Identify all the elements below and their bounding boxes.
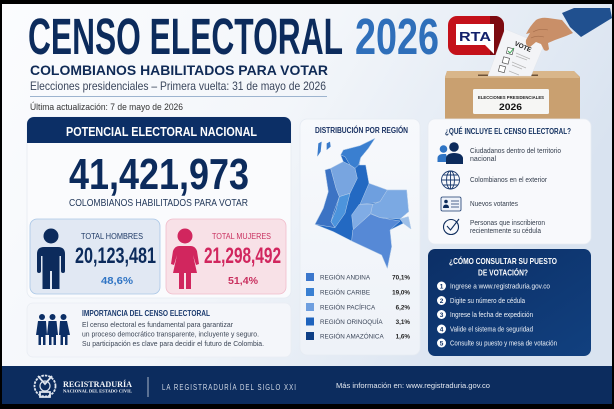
item: cédula: recientemente su cédula [470, 228, 541, 235]
item: ciudadanos [470, 148, 561, 163]
icon: globe [442, 171, 460, 189]
item: exterior: Colombianos en el exterior [470, 177, 548, 184]
legend [306, 272, 410, 340]
icon: citizens [438, 142, 463, 164]
subtitle: COLOMBIANOS HABILITADOS PARA VOTAR [30, 62, 328, 78]
panel title [449, 255, 557, 278]
body text: Su participación es clave para decidir el futuro de Colombia. [82, 339, 264, 348]
legend: orinoquía: REGIÓN ORINOQUÍA [320, 317, 383, 326]
logo wordmark: NACIONAL DEL ESTADO CIVIL [63, 390, 133, 394]
card: mujeres: 51,4% [228, 275, 259, 287]
step 5 [437, 338, 557, 348]
footer slogan: LA REGISTRADURÍA DEL SIGLO XXI [162, 382, 296, 392]
step 5: 5 [440, 340, 444, 348]
panel: distribución por región [300, 119, 420, 355]
legend: caribe: 19,0% [392, 290, 410, 296]
legend: orinoquía: 3,1% [396, 319, 410, 326]
ballot box [445, 71, 580, 120]
icon: woman [171, 228, 199, 289]
card: mujeres [166, 219, 286, 294]
icon: RTA logo [448, 16, 504, 55]
body text [82, 320, 264, 348]
card: hombres: 48,6% [101, 275, 134, 287]
step 4: 4 [440, 326, 444, 334]
panel: cómo consultar [428, 249, 591, 356]
item: cédula: Personas que inscribieron [470, 220, 545, 227]
step 3 [437, 310, 533, 319]
icon: id card [441, 197, 461, 211]
step 2 [437, 296, 525, 305]
card: mujeres: 21,298,492 [204, 243, 281, 268]
panel: distribución por región: DISTRIBUCIÓN POR REGIÓN [315, 126, 408, 135]
step 5: Consulte su puesto y mesa de votación [450, 340, 557, 348]
panel header [27, 117, 291, 143]
item: cédula [470, 220, 545, 235]
legend: caribe: REGIÓN CARIBE [320, 288, 370, 296]
big number: 41,421,973 [69, 150, 249, 199]
box label [473, 89, 549, 114]
item: ciudadanos: nacional [470, 156, 497, 163]
step 2: 2 [440, 298, 444, 305]
legend: amazónica: 1,6% [396, 334, 410, 340]
step 4 [437, 324, 533, 334]
panel: importancia: IMPORTANCIA DEL CENSO ELECTORAL [82, 309, 210, 318]
step 3: 3 [440, 312, 444, 319]
title: 2026 [355, 8, 439, 65]
panel title: DE VOTACIÓN? [478, 266, 528, 278]
body text: un proceso democrático transparente, incluyente y seguro. [82, 330, 259, 338]
footer [2, 366, 612, 404]
card: hombres: 20,123,481 [75, 243, 156, 268]
legend: amazónica: REGIÓN AMAZÓNICA [320, 332, 384, 340]
last update: Última actualización: 7 de mayo de 2026 [30, 102, 183, 113]
hand and sleeve [526, 8, 612, 51]
panel: qué incluye: ¿QUÉ INCLUYE EL CENSO ELECTORAL? [445, 127, 571, 136]
big number caption: COLOMBIANOS HABILITADOS PARA VOTAR [69, 197, 248, 209]
footer link: Más información en: www.registraduria.gov.co [336, 381, 490, 390]
icon: registraduría crest [34, 376, 56, 397]
election date: Elecciones presidenciales – Primera vuelta: 31 de mayo de 2026 [30, 79, 326, 93]
legend: andina: 70,1% [392, 274, 410, 282]
legend: pacífica: REGIÓN PACÍFICA [320, 302, 376, 312]
legend: pacífica [306, 302, 410, 312]
icon: check circle [444, 219, 459, 234]
step 2: Digite su número de cédula [450, 298, 525, 305]
icon: RTA logo: RTA [459, 30, 491, 44]
ballot paper: VOTE [513, 40, 533, 54]
item: nuevos votantes: Nuevos votantes [470, 201, 518, 208]
step 3: Ingrese la fecha de expedición [450, 312, 533, 319]
card: mujeres: TOTAL MUJERES [212, 232, 271, 241]
step 4: Valide el sistema de seguridad [450, 326, 533, 334]
legend: caribe [306, 288, 410, 296]
icon: man [37, 228, 65, 289]
legend: amazónica [306, 332, 410, 340]
logo wordmark [63, 379, 133, 394]
title: CENSO ELECTORAL [28, 8, 343, 65]
step 1: 1 [440, 284, 444, 290]
step 1 [437, 282, 550, 290]
panel: potencial electoral nacional [27, 117, 291, 298]
icon: three people [36, 314, 70, 345]
map of Colombia [315, 138, 411, 268]
panel: qué incluye [428, 119, 591, 244]
step 1: Ingrese a www.registraduria.gov.co [450, 284, 550, 290]
box label: 2026 [499, 102, 522, 113]
box label: ELECCIONES PRESIDENCIALES [478, 95, 545, 101]
legend: andina: REGIÓN ANDINA [320, 272, 371, 282]
panel: importancia [27, 303, 291, 357]
card: hombres: TOTAL HOMBRES [81, 232, 143, 241]
ballot paper [488, 29, 544, 76]
legend: pacífica: 6,2% [396, 304, 410, 312]
logo wordmark: REGISTRADURÍA [63, 379, 132, 389]
legend: orinoquía [306, 317, 410, 326]
item: ciudadanos: Ciudadanos dentro del territorio [470, 148, 561, 155]
card: hombres [30, 219, 160, 294]
legend: andina [306, 272, 410, 282]
body text: El censo electoral es fundamental para garantizar [82, 320, 233, 329]
panel title: ¿CÓMO CONSULTAR SU PUESTO [449, 255, 557, 266]
panel header: POTENCIAL ELECTORAL NACIONAL [66, 124, 257, 139]
